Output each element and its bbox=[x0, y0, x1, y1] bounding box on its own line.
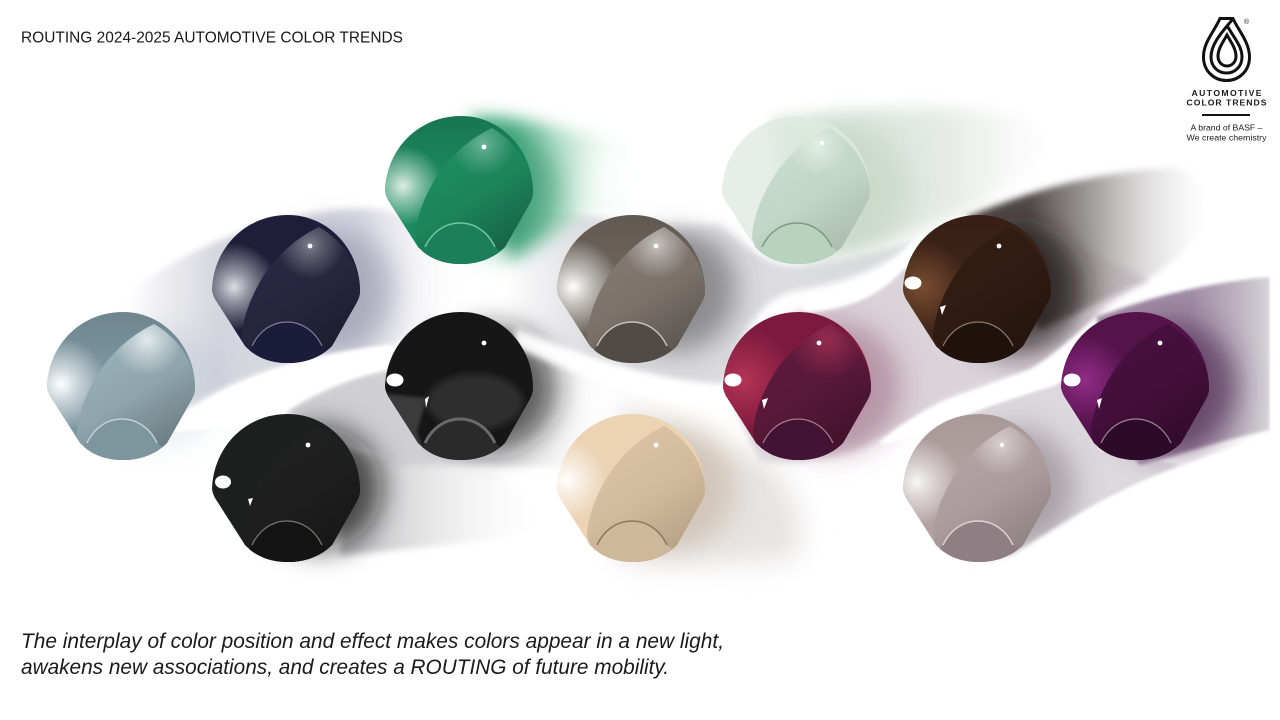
band: under navy, right of black bbox=[285, 318, 610, 466]
trail: pale green sphere bbox=[770, 108, 1040, 264]
gloss highlights bbox=[904, 244, 1001, 315]
sphere: green bbox=[385, 116, 533, 264]
specular dot bbox=[482, 145, 486, 149]
sphere: blue grey bbox=[47, 312, 195, 460]
white cover: above taupe bbox=[585, 125, 745, 218]
icon: concentric drop bbox=[1204, 18, 1250, 80]
sphere: mauve bbox=[903, 414, 1051, 562]
sphere: pale green bbox=[722, 116, 870, 264]
logo tagline: A brand of BASF – bbox=[1190, 124, 1263, 132]
caption: awakens new associations, and creates a ROUTING of future mobility. bbox=[21, 656, 669, 679]
halos: soft dark falloff next to each sphere bbox=[100, 124, 1238, 550]
band: behind wine and brown bbox=[725, 230, 1150, 463]
caption: The interplay of color position and effect makes colors appear in a new light, bbox=[21, 630, 724, 653]
band: lavender left bbox=[128, 209, 470, 405]
white ribbon: pale green to brown bbox=[803, 213, 970, 312]
band: between mauve and plum bbox=[960, 380, 1180, 556]
gloss highlights bbox=[386, 341, 486, 408]
white ribbon: under taupe bbox=[515, 328, 730, 410]
white cover: below right trails bbox=[950, 433, 1280, 600]
flowing shadow trails behind the spheres bbox=[100, 108, 1280, 600]
band: below glossy black bbox=[340, 450, 540, 556]
specular dot bbox=[1000, 443, 1004, 447]
white ribbon: brown to plum bbox=[880, 317, 1097, 445]
sphere: brown bbox=[903, 215, 1051, 363]
specular dot bbox=[654, 443, 658, 447]
band: beige surroundings bbox=[620, 402, 800, 563]
sphere: glossy black centre bbox=[385, 312, 533, 460]
white ribbon: navy to black bbox=[165, 345, 392, 432]
sphere: black bbox=[212, 414, 360, 562]
trail: brown sphere bbox=[965, 168, 1207, 330]
specular dot bbox=[820, 141, 824, 145]
title: ROUTING 2024-2025 AUTOMOTIVE COLOR TRENDS bbox=[21, 30, 403, 46]
sphere: beige bbox=[557, 414, 705, 562]
registered mark: ® bbox=[1244, 18, 1250, 26]
logo wordmark: AUTOMOTIVE bbox=[1192, 88, 1262, 98]
sphere: navy bbox=[212, 215, 360, 363]
logo: Automotive Color Trends: COLOR TRENDS bbox=[1186, 98, 1267, 108]
gloss highlights bbox=[1064, 341, 1162, 409]
specular dot bbox=[654, 244, 658, 248]
trail: plum sphere bbox=[1097, 277, 1270, 465]
white edge: plum trail right bbox=[1270, 260, 1280, 450]
specular dot bbox=[308, 244, 312, 248]
logo: Automotive Color Trends bbox=[1186, 18, 1267, 142]
logo: Automotive Color Trends: We create chemistry bbox=[1186, 134, 1266, 142]
gloss highlights bbox=[215, 443, 310, 506]
sphere: plum bbox=[1061, 312, 1209, 460]
gloss highlights bbox=[724, 341, 821, 409]
sphere: wine red bbox=[723, 312, 871, 460]
trail: green sphere bbox=[470, 116, 650, 260]
caption bbox=[21, 630, 724, 679]
sphere: taupe bbox=[557, 215, 705, 363]
band: behind taupe bbox=[505, 208, 915, 385]
